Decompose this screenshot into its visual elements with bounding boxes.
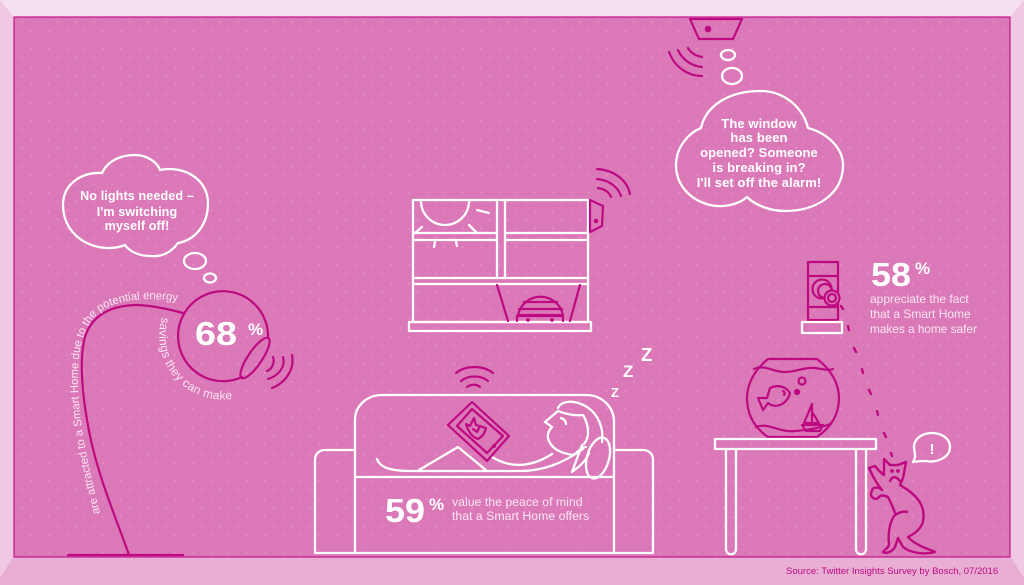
icon: lamp wifi [267, 355, 293, 388]
stat 58: % [915, 259, 930, 278]
icon: robot vacuum [497, 285, 580, 321]
camera shelf [802, 322, 842, 333]
icon: zzz: Z [623, 362, 633, 381]
thought text: The window [721, 116, 797, 131]
stat 58 [870, 256, 977, 336]
thought text: has been [730, 130, 788, 145]
stat 59: % [429, 495, 444, 514]
icon: tablet wifi [456, 367, 493, 387]
panel: security camera and stat [802, 256, 977, 456]
icon: camera [808, 262, 840, 320]
stat 59 [385, 492, 589, 529]
source note: Source: Twitter Insights Survey by Bosch, 07/2016 [786, 566, 998, 577]
thought cloud: lamp: No lights needed – [80, 189, 194, 203]
panel: sofa [315, 344, 653, 553]
panel: fishbowl and table [715, 359, 950, 554]
thought text: I'll set off the alarm! [697, 175, 821, 190]
panel: lamp [67, 290, 294, 556]
stat 59: that a Smart Home offers [452, 509, 589, 523]
curved text: attracted: are attracted to a Smart Home due to the potential energy [70, 291, 178, 514]
window frame [409, 200, 591, 331]
table [715, 439, 876, 554]
percentage 68: 68 [195, 315, 237, 352]
curved text: savings: savings they can make [158, 318, 232, 400]
person on sofa [377, 402, 614, 481]
icon: zzz: Z [641, 344, 652, 365]
thought cloud: lamp: I'm switching [97, 205, 177, 219]
icon: cat speech bubble: ! [930, 441, 934, 458]
thought cloud [676, 50, 843, 211]
icon: zzz: Z [611, 385, 619, 400]
percentage 68: % [248, 320, 263, 339]
stat 58: that a Smart Home [870, 307, 971, 321]
icon: zzz [611, 344, 652, 400]
stat 58: appreciate the fact [870, 292, 969, 306]
icon: window sensor [590, 169, 630, 232]
lamp stem and base [68, 305, 183, 555]
sofa outline [315, 395, 653, 553]
icon: ceiling sensor [669, 19, 742, 76]
stat 59: value the peace of mind [452, 495, 583, 509]
icon: cat [869, 459, 935, 553]
stat 58: 58 [871, 256, 911, 293]
thought text [697, 116, 821, 190]
thought cloud: lamp: myself off! [105, 219, 169, 233]
thought text: is breaking in? [712, 160, 806, 175]
laser dashes [841, 306, 892, 456]
icon: tablet with shield [448, 402, 509, 461]
panel: ceiling sensor and thought [669, 19, 843, 211]
stat 59: 59 [385, 492, 425, 529]
percentage 68 [195, 315, 263, 352]
icon: sun [415, 201, 489, 247]
thought text: opened? Someone [700, 145, 818, 160]
stat 58: makes a home safer [870, 322, 977, 336]
lamp head circle [178, 291, 274, 382]
icon: cat speech bubble [913, 433, 950, 462]
thought cloud: lamp [63, 155, 216, 282]
panel: window [409, 169, 630, 331]
icon: fishbowl [747, 359, 839, 437]
